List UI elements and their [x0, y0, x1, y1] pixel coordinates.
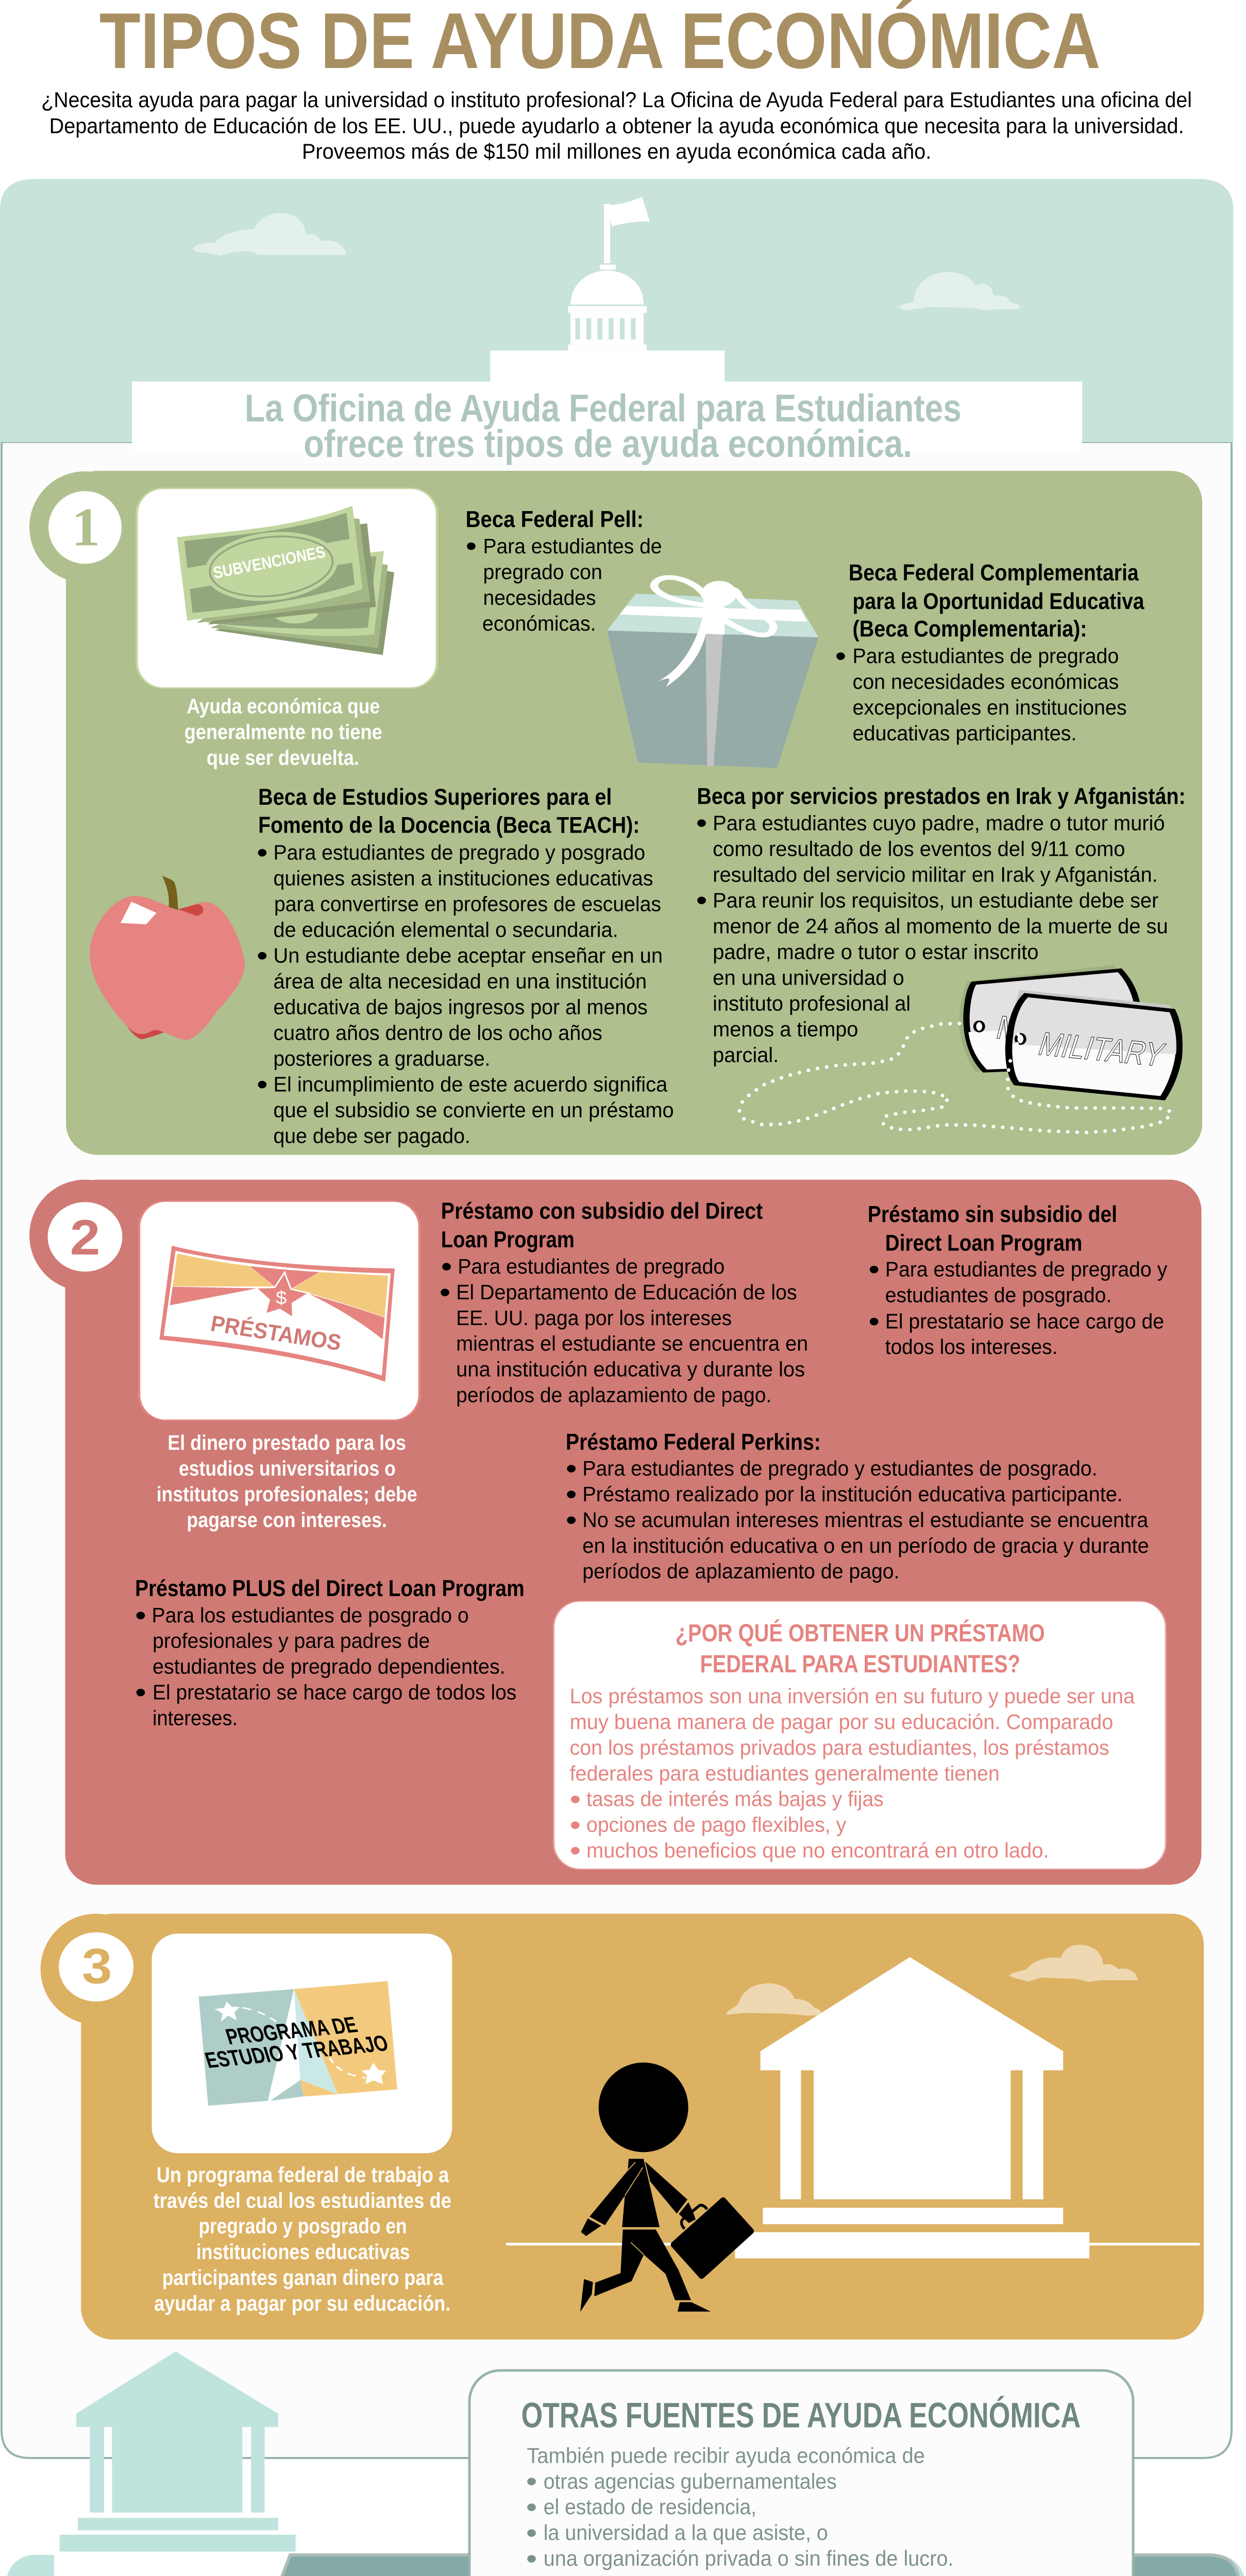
text: Beca Irak y Afganistán: •: [696, 808, 707, 839]
text: préstamo PLUS: [135, 1575, 525, 1730]
number badge 1: [48, 491, 122, 564]
icon: school building: [506, 1957, 1200, 2258]
text: préstamo con subsidio: •: [440, 1277, 450, 1308]
text: préstamo con subsidio: •: [441, 1251, 452, 1282]
caption: loans: pagarse con intereses.: [187, 1508, 387, 1532]
text: Beca TEACH: para convertirse en profesores de escuelas: [274, 892, 661, 916]
caption: loans: institutos profesionales; debe: [157, 1482, 417, 1506]
text: préstamo PLUS: intereses.: [153, 1706, 238, 1730]
text: Beca TEACH: El incumplimiento de este acuerdo significa: [273, 1073, 668, 1096]
card: loans icon background: [139, 1201, 419, 1420]
text: Beca Irak y Afganistán: •: [696, 885, 707, 916]
text: Beca TEACH: de educación elemental o secundaria.: [273, 918, 618, 942]
text: préstamo con subsidio: Para estudiantes de pregrado: [458, 1255, 725, 1278]
text: Beca TEACH: que debe ser pagado.: [273, 1124, 470, 1148]
text: préstamo con subsidio: Préstamo con subsidio del Direct: [441, 1198, 763, 1224]
text: Beca Federal Pell: Para estudiantes de: [483, 535, 662, 558]
text: Beca Complementaria: [835, 560, 1144, 745]
panel background: [29, 471, 1202, 1155]
text: préstamo Perkins: períodos de aplazamiento de pago.: [582, 1560, 900, 1583]
text: préstamo PLUS: Para los estudiantes de posgrado o: [152, 1603, 469, 1627]
text: préstamo Perkins: [566, 1429, 1149, 1583]
text: préstamo sin subsidio: [868, 1201, 1167, 1359]
text: Beca TEACH: que el subsidio se convierte en un préstamo: [273, 1098, 674, 1122]
caption: loans: [157, 1431, 417, 1532]
panel: section 3 work study: Un programa federal de trabajo a: [157, 2163, 449, 2187]
panel background: [29, 1180, 1202, 1885]
text list: la universidad a la que asiste, o: [544, 2521, 828, 2545]
text: préstamo PLUS: •: [135, 1600, 146, 1631]
text: Beca TEACH: •: [257, 1069, 268, 1100]
text: Beca TEACH: Un estudiante debe aceptar enseñar en un: [273, 944, 663, 968]
text: Beca TEACH: [257, 784, 674, 1148]
text: préstamo con subsidio: Loan Program: [441, 1227, 575, 1252]
text: Beca TEACH: Fomento de la Docencia (Beca TEACH):: [258, 812, 639, 838]
panel: section 3 work study: ayudar a pagar por su educación.: [154, 2292, 450, 2315]
text: Beca Irak y Afganistán: en una universidad o: [713, 966, 904, 990]
text: Beca Irak y Afganistán: [696, 784, 1186, 1067]
callout: why federal loan: opciones de pago flexibles, y: [586, 1813, 846, 1836]
text: Beca Complementaria: •: [835, 641, 846, 672]
text: préstamo PLUS: Préstamo PLUS del Direct Loan Program: [135, 1575, 525, 1601]
text: préstamo con subsidio: El Departamento de Educación de los: [456, 1280, 797, 1304]
text: Beca TEACH: Para estudiantes de pregrado y posgrado: [273, 841, 645, 865]
text list: •: [526, 2492, 537, 2522]
text: préstamo Perkins: •: [566, 1504, 577, 1535]
text: préstamo con subsidio: períodos de aplazamiento de pago.: [456, 1383, 771, 1406]
card: money icon background: [137, 488, 437, 688]
icon: clouds: [726, 1945, 1138, 2015]
icon: walking student with briefcase: [580, 2062, 751, 2312]
card: work study icon: [152, 1934, 452, 2153]
text: préstamo PLUS: profesionales y para padres de: [153, 1629, 430, 1652]
icon: dog tags and chain: M: [992, 1009, 1027, 1047]
text: Beca Irak y Afganistán: instituto profesional al: [713, 992, 911, 1015]
text: Beca TEACH: educativa de bajos ingresos por al menos: [273, 995, 648, 1019]
text list: •: [526, 2466, 537, 2497]
icon: gift box: [607, 578, 818, 768]
panel: section 1 grants: [29, 471, 1202, 1155]
icon: money bills: [177, 506, 394, 655]
number badge 1: 1: [72, 497, 100, 557]
caption: work study: pregrado y posgrado en: [199, 2214, 407, 2238]
number badge 2: [48, 1202, 122, 1272]
caption: work study: instituciones educativas: [196, 2240, 410, 2264]
text: préstamo con subsidio: [440, 1198, 808, 1406]
text: Beca TEACH: posteriores a graduarse.: [273, 1047, 490, 1071]
text: Beca Irak y Afganistán: menos a tiempo: [713, 1018, 858, 1041]
text: Beca TEACH: cuatro años dentro de los ocho años: [273, 1021, 602, 1045]
text list: •: [526, 2544, 537, 2574]
number badge 3: 3: [82, 1938, 112, 1994]
text list: También puede recibir ayuda económica de: [527, 2444, 925, 2467]
text: Beca TEACH: Beca de Estudios Superiores para el: [258, 784, 612, 810]
text: Beca Federal Pell: pregrado con: [483, 561, 602, 584]
text: préstamo sin subsidio: •: [868, 1306, 880, 1337]
panel: other sources of aid: [469, 2370, 1133, 2576]
text: préstamo PLUS: •: [135, 1677, 146, 1708]
callout: why federal loan: •: [570, 1835, 581, 1866]
icon: dog tags and chain: [739, 965, 1179, 1132]
text: Beca Federal Pell: •: [466, 531, 477, 562]
icon: money bills: SUBVENCIONES: [212, 542, 327, 582]
header block: [41, 0, 1192, 163]
icon: loan banner: $: [276, 1288, 287, 1308]
icon: cloud right: [899, 272, 1020, 311]
text: préstamo con subsidio: una institución educativa y durante los: [456, 1358, 805, 1381]
panel: section 3 work study: [41, 1913, 1204, 2340]
text: préstamo sin subsidio: •: [868, 1253, 880, 1285]
icon: small building and path: [60, 2351, 296, 2552]
panel: application info background: [6, 2555, 1245, 2576]
callout: why federal loan: •: [570, 1784, 581, 1815]
number badge 2: 2: [70, 1210, 100, 1265]
text: Beca Federal Pell: económicas.: [482, 612, 596, 635]
text: Beca Complementaria: educativas participantes.: [853, 722, 1076, 745]
callout: why federal loan: tasas de interés más bajas y fijas: [586, 1787, 884, 1810]
text: préstamo PLUS: estudiantes de pregrado dependientes.: [153, 1655, 506, 1678]
text: Beca TEACH: •: [257, 837, 268, 868]
panel: section 3 work study: participantes ganan dinero para: [162, 2266, 444, 2290]
card: work study icon: ESTUDIO Y TRABAJO: [202, 2030, 391, 2073]
caption: grants: generalmente no tiene: [184, 720, 382, 744]
sky background: [0, 179, 1233, 442]
icon: loan banner: PRÉSTAMOS: [209, 1311, 343, 1355]
text: préstamo PLUS: El prestatario se hace cargo de todos los: [153, 1681, 516, 1704]
caption: loans: El dinero prestado para los: [167, 1431, 406, 1454]
text: Beca Irak y Afganistán: parcial.: [713, 1043, 779, 1067]
text: Beca TEACH: •: [257, 940, 268, 971]
text list: el estado de residencia,: [544, 2495, 756, 2519]
caption: grants: que ser devuelta.: [207, 746, 359, 770]
text: Beca Federal Pell: [466, 506, 662, 635]
icon: loan banner: [159, 1246, 395, 1382]
intro text: [41, 88, 1192, 163]
text: préstamo sin subsidio: todos los intereses.: [885, 1335, 1057, 1359]
text list: [526, 2444, 953, 2574]
icon: cloud left: [193, 213, 346, 256]
text list: otras agencias gubernamentales: [544, 2469, 837, 2493]
callout: why federal loan: [554, 1601, 1166, 1869]
panel background: [41, 1913, 1204, 2340]
page frame panel: [2, 442, 1232, 2458]
panel: section 2 loans: [29, 1180, 1202, 1885]
card: work study icon: PROGRAMA DE: [223, 2012, 360, 2049]
icon: capitol building with flag: [132, 197, 1082, 451]
caption: work study: [154, 2163, 451, 2315]
caption: grants: Ayuda económica que: [187, 694, 380, 718]
text: Beca Federal Pell: Beca Federal Pell:: [466, 506, 644, 532]
panel: section 3 work study: través del cual los estudiantes de: [154, 2189, 451, 2212]
callout: why federal loan: •: [570, 1809, 581, 1840]
text: préstamo Perkins: •: [566, 1453, 577, 1484]
number badge 3: [59, 1933, 133, 2002]
text: préstamo con subsidio: EE. UU. paga por los intereses: [456, 1306, 732, 1330]
caption: loans: estudios universitarios o: [179, 1456, 396, 1480]
text: Beca TEACH: área de alta necesidad en una institución: [273, 970, 647, 993]
panel: sky with capitol: [0, 179, 1233, 465]
text: préstamo con subsidio: mientras el estudiante se encuentra en: [456, 1332, 808, 1355]
heading: [245, 386, 962, 465]
text list: •: [526, 2518, 537, 2548]
caption: grants: [184, 694, 382, 770]
text: préstamo Perkins: Préstamo Federal Perkins:: [566, 1429, 821, 1455]
icon: apple: [90, 875, 245, 1040]
text: Beca Federal Pell: necesidades: [483, 586, 596, 609]
text: préstamo Perkins: •: [566, 1479, 577, 1510]
text: Beca TEACH: quienes asisten a instituciones educativas: [273, 867, 653, 890]
